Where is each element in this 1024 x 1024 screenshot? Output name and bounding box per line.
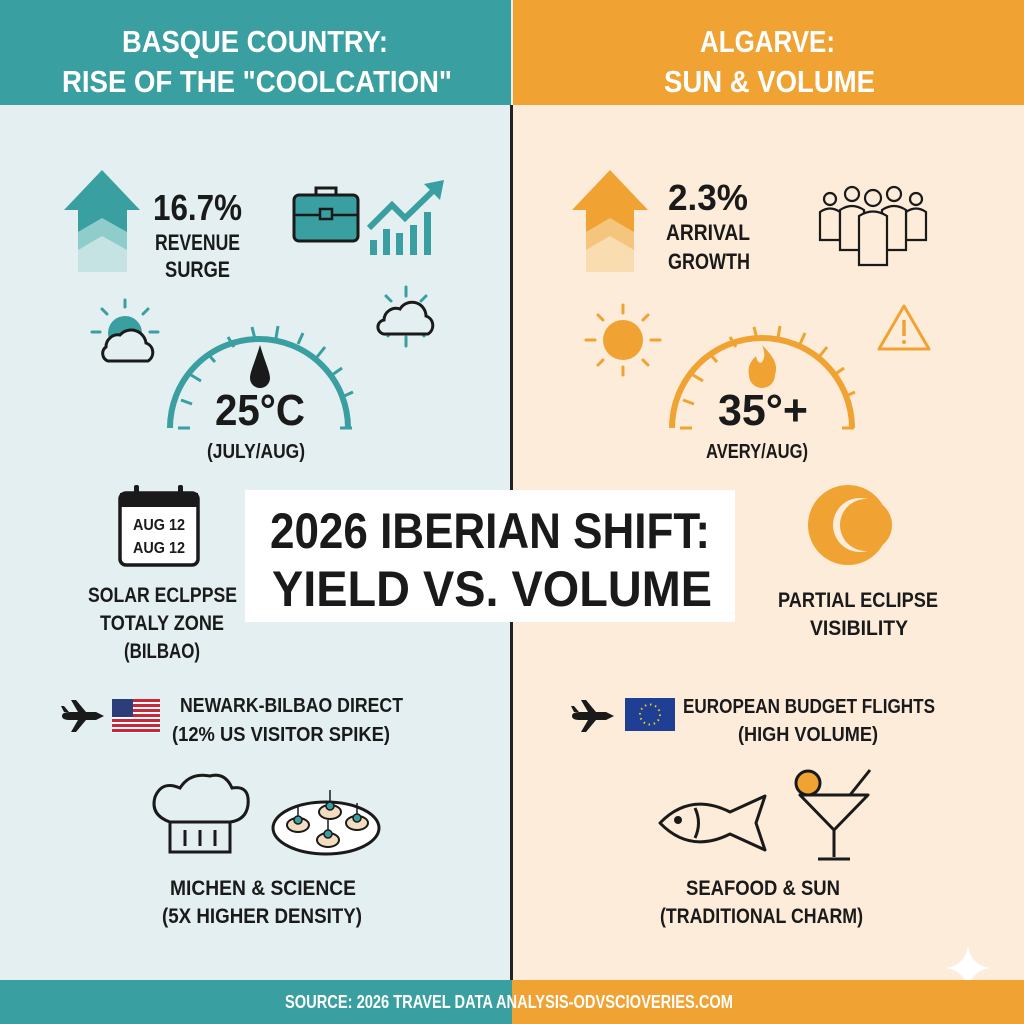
text: newark-bilbao [172, 695, 403, 746]
text: michelin & science: MICHEN & SCIENCE [170, 877, 356, 900]
text: newark-bilbao: NEWARK-BILBAO DIRECT [180, 695, 403, 717]
stat: arrivals: GROWTH [668, 249, 750, 274]
stat: revenue [153, 187, 242, 282]
text: seafood & sun: SEAFOOD & SUN [686, 877, 840, 900]
icon: warning triangle [879, 306, 929, 349]
stat: revenue: 16.7% [153, 187, 242, 228]
icon: fish [660, 796, 765, 850]
text: seafood & sun [660, 877, 863, 928]
stat: arrivals: ARRIVAL [666, 220, 750, 245]
stat: revenue: REVENUE [155, 230, 240, 255]
icon: calendar: AUG 12 [133, 540, 185, 557]
icon: crowd of people [820, 187, 926, 265]
icon: US flag [112, 699, 160, 733]
icon: EU flag [625, 698, 675, 731]
gauge: algarve temperature: AVERY/AUG) [706, 441, 808, 463]
text: european budget flights: (HIGH VOLUME) [738, 724, 878, 746]
text: eclipse totality: SOLAR ECLPPSE [88, 584, 237, 607]
header: basque [0, 0, 511, 105]
icon: growth chart [369, 180, 444, 255]
icon: sun [586, 305, 660, 375]
title box [245, 490, 735, 622]
title box: 2026 IBERIAN SHIFT: [270, 503, 710, 559]
gauge: basque temperature: (JULY/AUG) [207, 441, 305, 463]
text: european budget flights [683, 696, 935, 746]
text: newark-bilbao: (12% US VISITOR SPIKE) [172, 724, 390, 746]
text: european budget flights: EUROPEAN BUDGET FLIGHTS [683, 696, 935, 718]
header: algarve [513, 0, 1024, 105]
gauge: basque temperature: 25°C [215, 386, 305, 435]
text: eclipse totality [88, 584, 237, 663]
icon: cocktail [796, 770, 870, 859]
icon: plane right [571, 700, 614, 732]
header: basque: RISE OF THE "COOLCATION" [62, 64, 452, 99]
text: eclipse totality: (BILBAO) [124, 640, 200, 663]
icon: partial eclipse [808, 485, 892, 565]
icon: tapas plate [273, 790, 379, 854]
icon: orange up arrow [572, 170, 648, 272]
text: seafood & sun: (TRADITIONAL CHARM) [660, 905, 863, 928]
text: michelin & science: (5X HIGHER DENSITY) [162, 905, 362, 928]
icon: plane left [61, 700, 104, 732]
footer [0, 980, 1024, 1024]
gauge: algarve temperature [672, 326, 855, 463]
icon: teal up arrow [64, 170, 140, 272]
text: eclipse totality: TOTALY ZONE [100, 612, 224, 635]
icon: briefcase [294, 188, 358, 241]
stat: arrivals [666, 177, 750, 274]
icon: calendar [120, 485, 198, 565]
text: partial eclipse: PARTIAL ECLIPSE [778, 589, 938, 612]
title box: YIELD VS. VOLUME [272, 561, 712, 617]
icon: sun behind cloud [92, 300, 158, 361]
text: michelin & science [162, 877, 362, 928]
gauge: basque temperature [170, 326, 353, 463]
icon: calendar: AUG 12 [133, 517, 185, 534]
header: basque: BASQUE COUNTRY: [122, 24, 388, 59]
text: partial eclipse: VISIBILITY [810, 617, 908, 640]
header: algarve: ALGARVE: [700, 24, 835, 59]
stat: arrivals: 2.3% [668, 177, 748, 218]
stat: revenue: SURGE [165, 257, 230, 282]
header: algarve: SUN & VOLUME [664, 64, 875, 99]
icon: chef hat [154, 775, 248, 852]
icon: cloud with rays [378, 287, 433, 346]
gauge: algarve temperature: 35°+ [718, 386, 808, 435]
icon: sparkle [946, 946, 990, 990]
text: partial eclipse [778, 589, 938, 640]
footer: SOURCE: 2026 TRAVEL DATA ANALYSIS-ODVSCIOVERIES.COM [285, 992, 733, 1012]
